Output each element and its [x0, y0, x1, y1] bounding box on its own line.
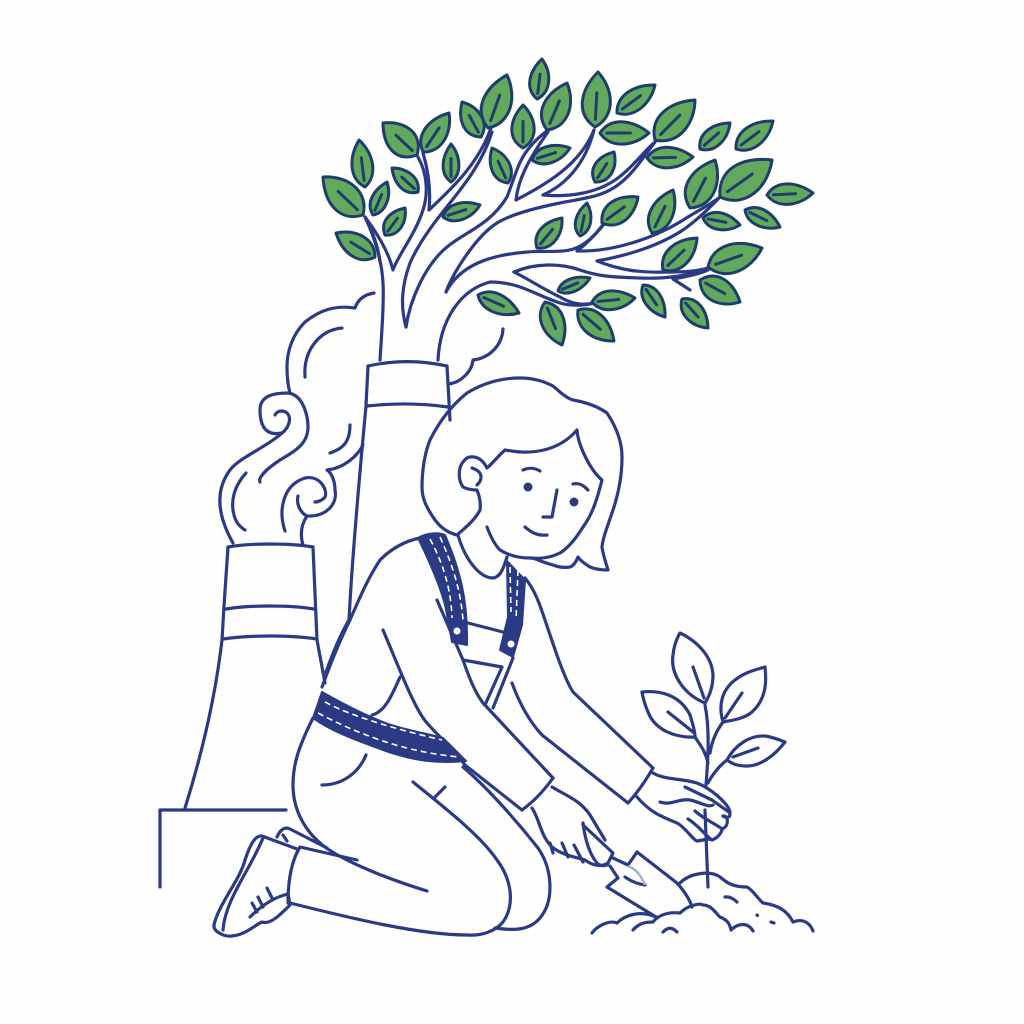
trowel	[583, 823, 692, 917]
sapling	[642, 633, 785, 887]
short chimney with base	[160, 544, 325, 887]
green leaves	[313, 58, 813, 349]
hair and face	[422, 378, 622, 578]
torso, arms and legs	[288, 538, 653, 935]
smoke clouds and swirls	[220, 293, 503, 545]
tree growing from chimney	[313, 58, 813, 360]
tree trunk and branches	[365, 128, 720, 360]
tall chimney	[349, 362, 450, 620]
shoes	[214, 828, 327, 936]
soil mound	[592, 873, 813, 933]
hands	[532, 773, 730, 866]
eyes	[524, 482, 578, 506]
overalls straps and belt	[313, 533, 525, 762]
woman planting	[214, 378, 730, 936]
